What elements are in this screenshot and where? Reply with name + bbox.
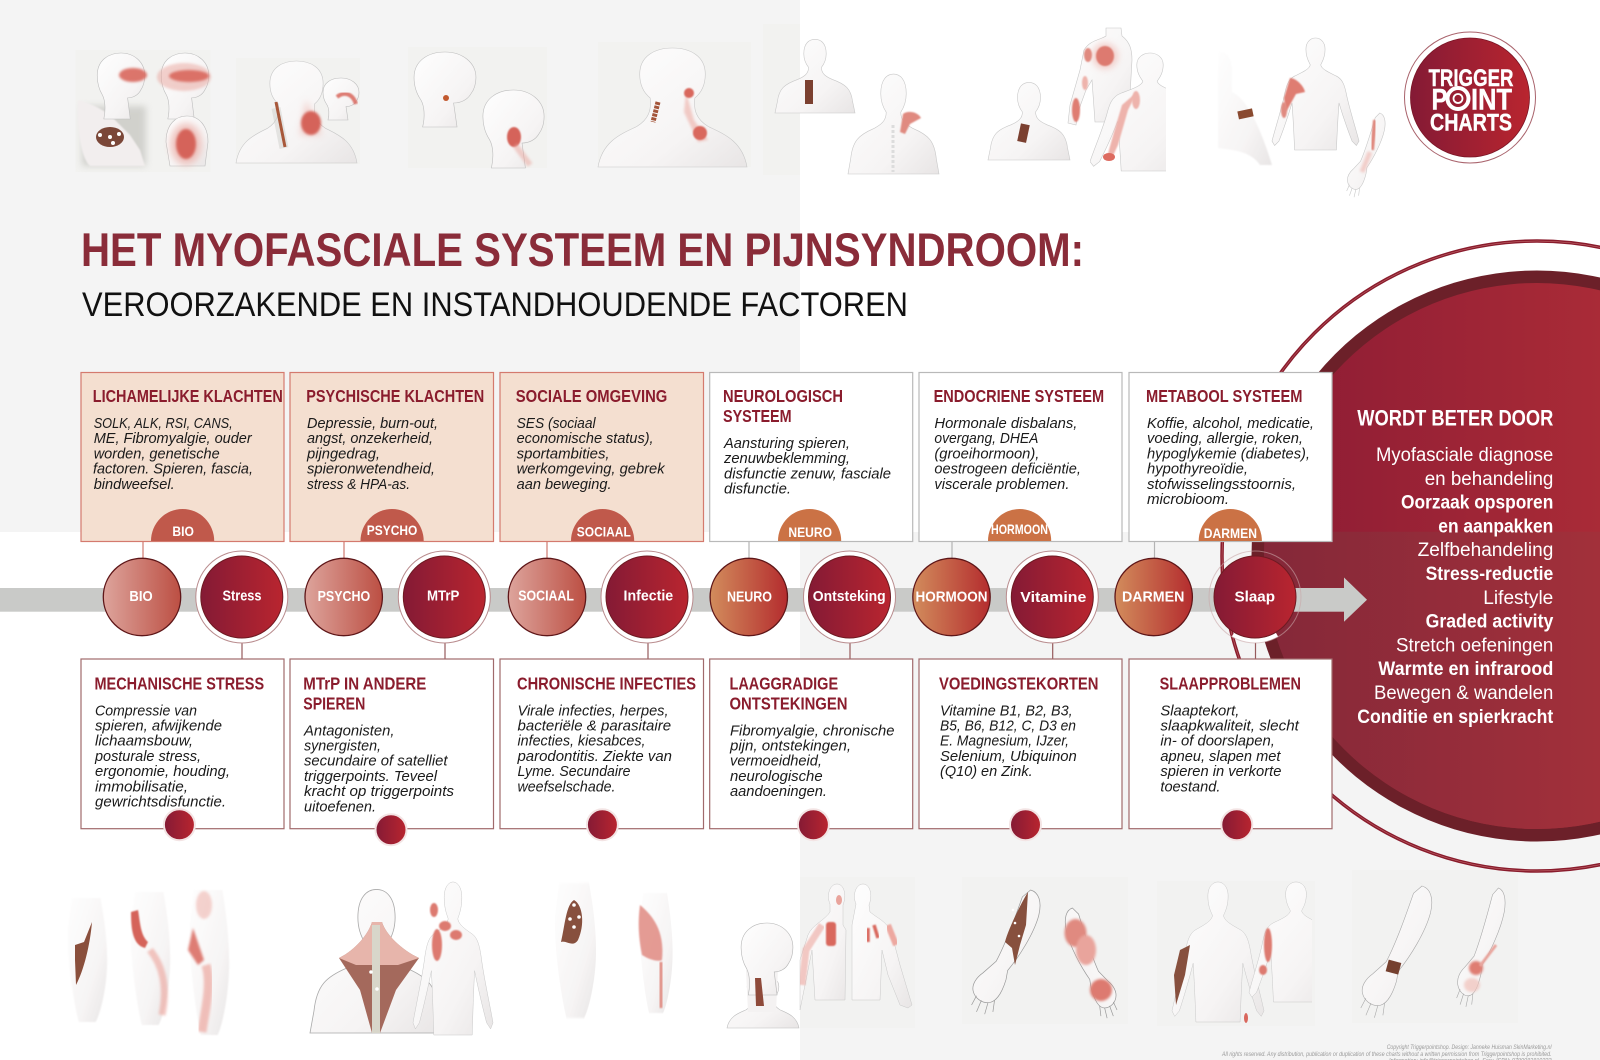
body text: factoren. Spieren, fascia, xyxy=(93,461,253,478)
heading: ENDOCRIENE SYSTEEM xyxy=(934,386,1104,406)
body text: secundaire of satelliet xyxy=(304,753,448,770)
body text: bacteriële & parasitaire xyxy=(518,718,671,734)
tab: SOCIAAL xyxy=(571,509,634,541)
panel: MTrP in andere spieren xyxy=(290,659,494,829)
heading: NEUROLOGISCH xyxy=(723,386,843,406)
timeline node: Stress: Stress xyxy=(222,588,262,605)
body text xyxy=(723,435,891,498)
tab: DARMEN xyxy=(1199,509,1262,541)
treatment list xyxy=(1357,445,1554,728)
body text xyxy=(517,702,672,795)
copyright note xyxy=(1221,1045,1552,1060)
body text: pijngedrag, xyxy=(306,445,380,462)
anatomy: back with shoulder pain and front torso xyxy=(1068,28,1166,172)
heading: MTrP IN ANDERE xyxy=(303,673,426,693)
timeline node: BIO: BIO xyxy=(129,588,153,605)
body text xyxy=(1160,702,1300,795)
heading: LAAGGRADIGE xyxy=(730,673,838,693)
body text: disfunctie. xyxy=(724,481,791,498)
body text: stofwisselingsstoornis, xyxy=(1147,476,1296,493)
timeline node: SOCIAAL: SOCIAAL xyxy=(518,588,574,605)
body text xyxy=(94,702,230,810)
body text xyxy=(93,415,253,493)
body text: uitoefenen. xyxy=(304,798,376,815)
timeline node: MTrP xyxy=(398,551,490,643)
treatment list: Lifestyle xyxy=(1483,588,1553,609)
body text: in- of doorslapen, xyxy=(1160,733,1275,750)
panel: laaggradige ontstekingen xyxy=(710,659,913,829)
panel: sociale omgeving xyxy=(500,372,704,542)
body text: Depressie, burn-out, xyxy=(307,415,438,432)
anatomy: trapezius back and side shoulder xyxy=(310,882,493,1035)
connector lines xyxy=(143,541,1256,659)
copyright note: Copyright Triggerpointshop. Design: Janneke Huisman SkinMarketing.nl xyxy=(1387,1045,1552,1051)
tab: NEURO: NEURO xyxy=(788,524,832,540)
body text: microbioom. xyxy=(1147,491,1229,508)
heading: LICHAMELIJKE KLACHTEN xyxy=(93,386,283,406)
body text: neurologische xyxy=(730,768,823,785)
treatment list: Myofasciale diagnose xyxy=(1376,445,1553,466)
body text: immobilisatie, xyxy=(95,778,188,795)
body text: Fibromyalgie, chronische xyxy=(730,722,894,739)
anatomy: hip and leg figures xyxy=(68,890,229,1035)
heading: SLAAPPROBLEMEN xyxy=(1160,673,1301,693)
timeline node: Stress xyxy=(196,551,288,643)
body text: hypothyreoïdie, xyxy=(1147,461,1248,478)
body text xyxy=(1147,415,1314,508)
anatomy: neck muscle and head xyxy=(236,61,359,163)
logo: Trigger Point Charts: TRIGGER xyxy=(1428,65,1514,92)
heading: CHRONISCHE INFECTIES xyxy=(517,673,696,693)
timeline node: Infectie xyxy=(601,551,693,643)
anatomy: shoulder and arm figures xyxy=(1218,38,1385,197)
timeline node: NEURO xyxy=(710,558,788,636)
panel: voedingstekorten xyxy=(919,659,1122,829)
body text: werkomgeving, gebrek xyxy=(517,461,666,478)
panel: neurologisch systeem xyxy=(710,372,913,542)
timeline node: HORMOON xyxy=(913,558,990,636)
body text: economische status), xyxy=(517,430,654,447)
body text: Koffie, alcohol, medicatie, xyxy=(1147,415,1314,432)
body text: parodontitis. Ziekte van xyxy=(517,748,672,765)
panel: metabool systeem xyxy=(1129,372,1332,542)
logo: Trigger Point Charts: P xyxy=(1432,84,1448,116)
body text: SOLK, ALK, RSI, CANS, xyxy=(94,415,233,432)
timeline node: Slaap: Slaap xyxy=(1234,589,1275,606)
heading: PSYCHISCHE KLACHTEN xyxy=(306,386,484,406)
heading: SOCIALE OMGEVING xyxy=(516,386,667,406)
timeline bar with arrow xyxy=(0,578,1367,622)
treatment list: Oorzaak opsporen xyxy=(1401,493,1553,514)
body text xyxy=(303,722,454,815)
logo: Trigger Point Charts: CHARTS xyxy=(1430,110,1512,136)
body text: kracht op triggerpoints xyxy=(304,783,454,800)
tab: BIO: BIO xyxy=(172,523,194,539)
body text: ergonomie, houding, xyxy=(95,763,230,780)
body text: sportambities, xyxy=(517,445,610,462)
body text: toestand. xyxy=(1160,778,1220,795)
treatment list: Conditie en spierkracht xyxy=(1357,707,1554,728)
body text: spieren, afwijkende xyxy=(95,718,222,734)
anatomy: upper back figures xyxy=(775,39,1070,174)
treatment list: Bewegen & wandelen xyxy=(1374,683,1553,704)
body text xyxy=(306,415,438,493)
tab: BIO xyxy=(151,509,214,541)
body text xyxy=(729,722,894,800)
body text: Vitamine B1, B2, B3, xyxy=(940,702,1073,719)
tab: HORMOON xyxy=(988,509,1051,541)
heading: SYSTEEM xyxy=(723,406,792,426)
panel: endocriene systeem xyxy=(919,372,1122,542)
heading: MECHANISCHE STRESS xyxy=(94,673,264,693)
copyright note: All rights reserved. Any distribution, publication or duplication of these charts without a written permission from Triggerpointshop is prohibited. xyxy=(1221,1052,1552,1058)
anatomy: front body with biceps muscle xyxy=(1172,882,1312,1023)
anatomy: head and face pain patterns xyxy=(78,53,211,166)
anatomy: jaw and cheek muscle heads xyxy=(414,52,544,168)
title: HET MYOFASCIALE SYSTEEM EN PIJNSYNDROOM: xyxy=(81,223,1084,276)
body text: (Q10) en Zink. xyxy=(940,763,1033,780)
body text: triggerpoints. Teveel xyxy=(304,768,438,785)
body text xyxy=(940,702,1077,780)
body text: vermoeidheid, xyxy=(730,753,822,770)
tab: SOCIAAL: SOCIAAL xyxy=(577,524,631,540)
heading: VOEDINGSTEKORTEN xyxy=(939,673,1098,693)
body text: disfunctie zenuw, fasciale xyxy=(724,465,891,482)
timeline node: DARMEN: DARMEN xyxy=(1122,589,1184,606)
body text: SES (sociaal xyxy=(517,415,596,432)
body text: infecties, kiesabces, xyxy=(518,733,646,750)
heading: ONTSTEKINGEN xyxy=(730,693,848,713)
body text: angst, onzekerheid, xyxy=(307,430,433,447)
body text: posturale stress, xyxy=(94,748,201,765)
anatomy: forearm muscle and pain pattern xyxy=(972,890,1117,1018)
treatment list: Stretch oefeningen xyxy=(1396,635,1553,656)
treatment list: Zelfbehandeling xyxy=(1418,540,1553,561)
timeline node: SOCIAAL xyxy=(508,558,586,636)
timeline node: Vitamine xyxy=(1006,551,1098,643)
anatomy: thigh muscle and pain pattern xyxy=(555,883,673,1018)
body text: Aansturing spieren, xyxy=(723,435,850,452)
treatment list: en aanpakken xyxy=(1438,516,1553,537)
panel: slaapproblemen xyxy=(1129,659,1332,829)
body text: zenuwbeklemming, xyxy=(723,450,850,467)
timeline node: Infectie: Infectie xyxy=(624,588,673,605)
anatomy: head side with neck muscle xyxy=(727,923,799,1028)
heading xyxy=(723,386,843,426)
panel: psychische klachten xyxy=(290,372,494,542)
body text: Antagonisten, xyxy=(303,722,394,739)
timeline node: NEURO: NEURO xyxy=(727,588,772,605)
heading xyxy=(730,673,848,713)
anatomy: wrist and forearm pain xyxy=(1361,886,1505,1018)
panel: lichamelijke klachten xyxy=(81,372,284,542)
timeline node: DARMEN xyxy=(1115,558,1192,636)
bottom panel dots xyxy=(164,809,1252,845)
body text: aan beweging. xyxy=(517,476,612,493)
timeline node: PSYCHO xyxy=(305,558,382,636)
body text: ME, Fibromyalgie, ouder xyxy=(94,430,253,447)
heading: SPIEREN xyxy=(303,693,365,713)
panel: mechanische stress xyxy=(81,659,284,829)
tab: DARMEN: DARMEN xyxy=(1204,525,1257,541)
timeline node: Ontsteking xyxy=(804,551,896,643)
logo: Trigger Point Charts: INT xyxy=(1471,84,1512,116)
body text: Lyme. Secundaire xyxy=(518,763,630,780)
body text: Virale infecties, herpes, xyxy=(518,702,668,719)
body text: apneu, slapen met xyxy=(1160,748,1281,765)
body text: voeding, allergie, roken, xyxy=(1147,430,1303,447)
treatment panel: wordt beter door xyxy=(1357,406,1554,728)
body text: Hormonale disbalans, xyxy=(934,415,1077,432)
panel: chronische infecties xyxy=(500,659,704,829)
timeline node: PSYCHO: PSYCHO xyxy=(318,588,370,605)
timeline node: HORMOON: HORMOON xyxy=(916,589,988,606)
body text xyxy=(934,415,1081,493)
heading: METABOOL SYSTEEM xyxy=(1146,386,1302,406)
treatment list: Stress-reductie xyxy=(1426,564,1553,585)
logo: Trigger Point Charts xyxy=(1404,32,1536,163)
treatment list: Graded activity xyxy=(1426,612,1554,633)
body text: Compressie van xyxy=(95,702,197,719)
treatment list: en behandeling xyxy=(1425,469,1553,490)
body text: (groeihormoon), xyxy=(934,445,1039,462)
body text: Selenium, Ubiquinon xyxy=(940,748,1077,765)
subtitle: VEROORZAKENDE EN INSTANDHOUDENDE FACTOREN xyxy=(82,286,908,324)
body text: worden, genetische xyxy=(94,445,220,462)
body text: E. Magnesium, IJzer, xyxy=(940,733,1069,750)
body text: weefselschade. xyxy=(518,778,616,795)
body text: overgang, DHEA xyxy=(934,430,1038,447)
tab: NEURO xyxy=(778,509,841,541)
body text: stress & HPA-as. xyxy=(307,476,410,493)
treatment list: Warmte en infrarood xyxy=(1378,659,1553,680)
heading xyxy=(303,673,426,713)
body text: pijn, ontstekingen, xyxy=(729,738,851,754)
body text: gewrichtsdisfunctie. xyxy=(95,794,226,810)
body text: aandoeningen. xyxy=(730,783,827,800)
timeline node: Vitamine: Vitamine xyxy=(1020,589,1086,606)
panel heading: WORDT BETER DOOR xyxy=(1357,406,1553,431)
timeline node: BIO xyxy=(103,558,181,636)
body text: slaapkwaliteit, slecht xyxy=(1160,718,1300,734)
body text: bindweefsel. xyxy=(94,476,175,493)
body text: B5, B6, B12, C, D3 en xyxy=(940,718,1076,734)
body text: Slaaptekort, xyxy=(1160,702,1239,719)
tab: HORMOON: HORMOON xyxy=(991,521,1048,537)
timeline node: Slaap xyxy=(1209,551,1301,643)
body text xyxy=(517,415,666,493)
body text: synergisten, xyxy=(304,738,381,754)
tab: PSYCHO: PSYCHO xyxy=(367,522,417,538)
body text: spieren in verkorte xyxy=(1160,763,1281,780)
anatomy: neck and shoulder from behind xyxy=(598,48,747,167)
body text: oestrogeen deficiëntie, xyxy=(934,461,1081,478)
anatomy: back and front torso with shoulder pain xyxy=(800,884,912,1010)
body text: lichaamsbouw, xyxy=(95,733,193,750)
big circle: backdrop of treatment panel xyxy=(1222,241,1600,871)
timeline node: MTrP: MTrP xyxy=(427,588,459,605)
body text: spieronwetendheid, xyxy=(307,461,435,478)
tab: PSYCHO xyxy=(360,509,424,541)
timeline node: Ontsteking: Ontsteking xyxy=(813,588,886,605)
body text: viscerale problemen. xyxy=(934,476,1069,493)
body text: hypoglykemie (diabetes), xyxy=(1147,445,1310,462)
